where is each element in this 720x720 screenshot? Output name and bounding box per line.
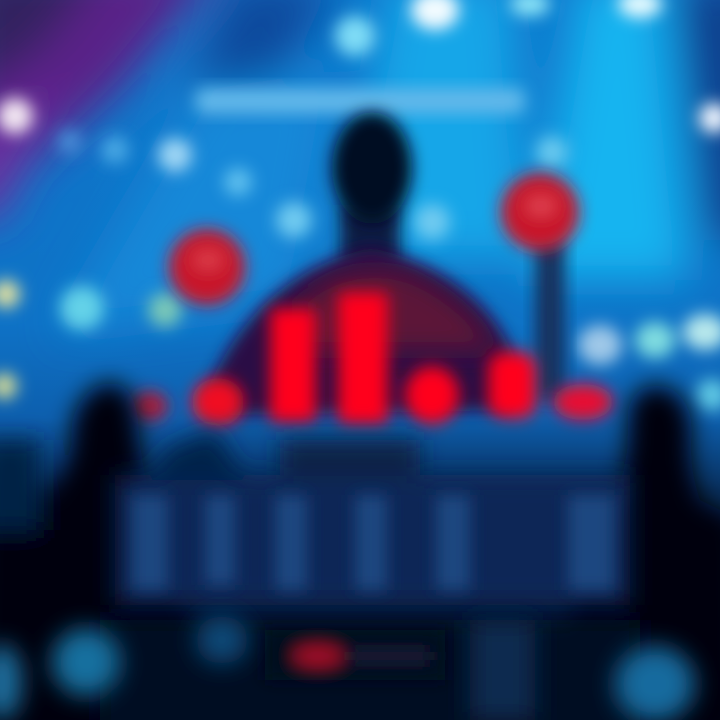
stage lighting xyxy=(0,0,720,330)
silhouette: torso xyxy=(205,248,515,415)
bottom bar xyxy=(265,630,445,680)
data panel columns xyxy=(132,495,614,590)
silhouette: presenter xyxy=(205,112,515,415)
bar 5 xyxy=(405,366,459,424)
left figure xyxy=(0,382,190,720)
raised pole xyxy=(535,240,565,400)
light spots xyxy=(0,0,720,411)
red ball right xyxy=(501,173,579,251)
bar 6 xyxy=(488,352,536,418)
bar 1 xyxy=(132,391,168,421)
silhouette: neck xyxy=(340,205,400,265)
silhouette: chest shading xyxy=(300,270,495,350)
left shoulder shadow xyxy=(0,440,40,530)
right figure xyxy=(570,385,720,720)
bottom blue lights xyxy=(0,616,695,720)
bar 2 xyxy=(192,378,244,426)
heading xyxy=(195,88,525,114)
bar 4 xyxy=(338,292,388,424)
bar 7 xyxy=(553,384,613,420)
red bar chart xyxy=(132,292,613,426)
bottom shadow xyxy=(100,620,640,720)
data panel xyxy=(115,430,630,605)
silhouette: head xyxy=(332,112,412,224)
audience silhouettes xyxy=(0,382,720,720)
red ball left xyxy=(169,229,245,305)
bar 3 xyxy=(270,308,316,422)
